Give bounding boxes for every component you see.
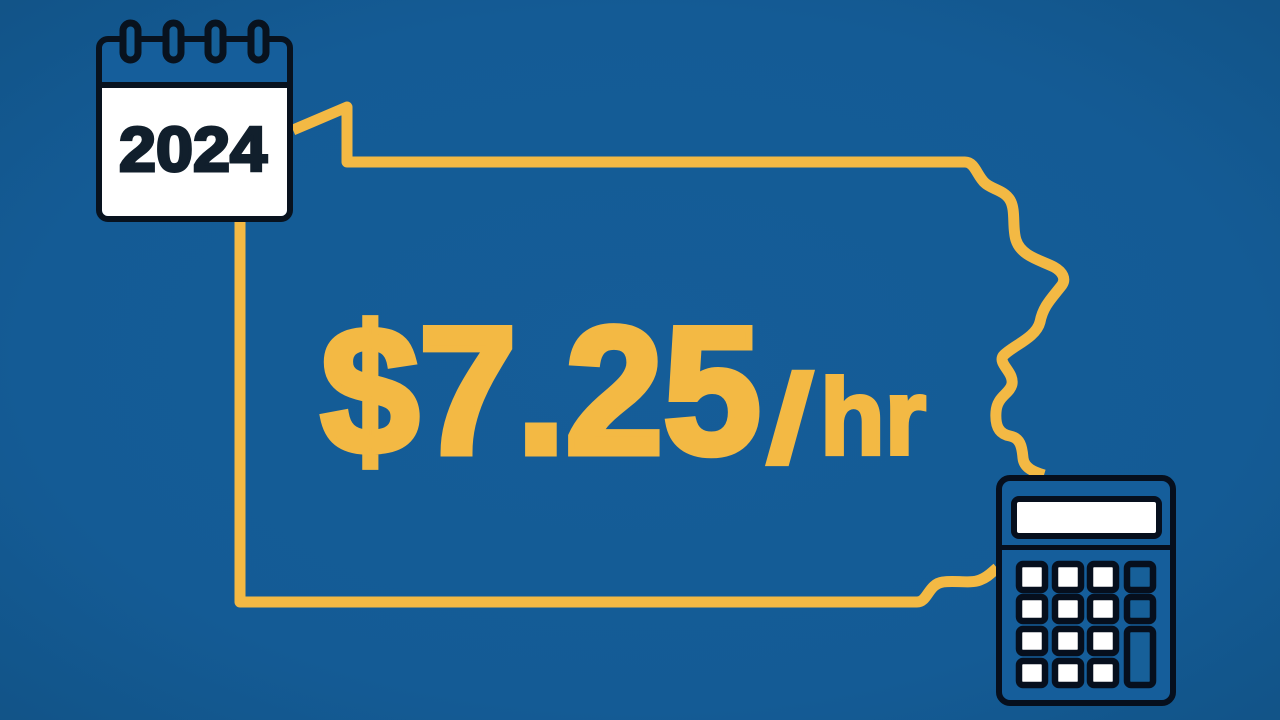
calendar rings	[123, 23, 266, 60]
calculator screen	[1014, 499, 1159, 536]
slash: /	[764, 348, 816, 491]
wage figure	[321, 290, 926, 492]
icon: calendar	[99, 23, 290, 219]
calendar body	[99, 39, 290, 219]
icon: calculator	[999, 478, 1173, 703]
per hour unit: hr	[820, 356, 926, 477]
calculator divider	[999, 545, 1173, 550]
year: 2024	[119, 115, 267, 185]
amount: $7.25	[321, 290, 761, 492]
calendar page	[102, 85, 287, 216]
state outline of Pennsylvania	[293, 107, 1064, 475]
state outline south and west border	[240, 222, 997, 602]
calculator white keys	[1019, 564, 1116, 685]
calculator body	[999, 478, 1173, 703]
calendar header line	[100, 82, 289, 88]
calculator blue keys	[1127, 564, 1153, 685]
